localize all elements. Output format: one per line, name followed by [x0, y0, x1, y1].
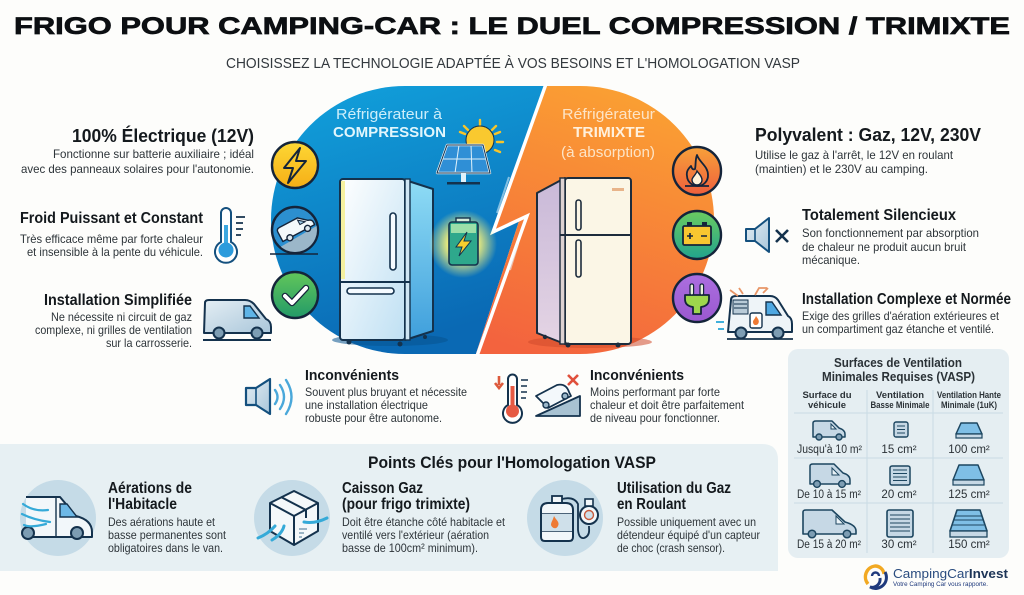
icon: check circle [272, 272, 318, 318]
block: caisson gaz [342, 480, 506, 555]
block: froid puissant: et insensible à la pente du véhicule. [27, 245, 203, 259]
block: installation complexe [802, 291, 1011, 336]
row: de 10 à 15 m² [797, 464, 990, 501]
table title: Minimales Requises (VASP) [822, 369, 975, 384]
panel: ventilation table [788, 349, 1009, 558]
block: totalement silencieux [802, 207, 979, 267]
heading: compression: COMPRESSION [333, 124, 446, 141]
block: 100% électrique: avec des panneaux solaires pour l'autonomie. [21, 162, 254, 176]
panel: points clés homologation [0, 444, 778, 571]
logo: CampingCarInvest [865, 566, 1009, 588]
block: aérations: Aérations de [108, 480, 192, 497]
block: inconvénients compression: Inconvénients [305, 367, 399, 384]
row: de 10 à 15 m²: De 10 à 15 m² [797, 489, 861, 501]
block: polyvalent: Polyvalent : Gaz, 12V, 230V [755, 125, 981, 145]
block: polyvalent: (maintien) et le 230V au camping. [755, 162, 928, 176]
block: totalement silencieux: mécanique. [802, 253, 860, 267]
heading: trimixte: TRIMIXTE [573, 124, 645, 141]
block: caisson gaz: basse de 100cm² minimum). [342, 541, 478, 555]
heading: compression: Réfrigérateur à [336, 106, 443, 123]
column headers: Minimale (1uK) [941, 400, 997, 411]
block: inconvénients trimixte: Moins performant par forte [590, 385, 720, 399]
block: installation simplifiée: Ne nécessite ni circuit de gaz [51, 310, 192, 324]
block: installation complexe: un compartiment gaz étanche et ventilé. [802, 322, 994, 336]
block: utilisation du gaz: Possible uniquement avec un [617, 515, 756, 529]
row: jusqu'à 10 m²: 100 cm² [948, 444, 990, 456]
icon: gas cylinder [527, 480, 603, 556]
block: caisson gaz: Caisson Gaz [342, 480, 423, 497]
block: aérations [108, 480, 227, 555]
icon: loud speaker [246, 379, 292, 414]
table title [822, 355, 975, 384]
block: inconvénients compression: robuste pour être autonome. [305, 411, 442, 425]
block: polyvalent: Utilise le gaz à l'arrêt, le 12V en roulant [755, 148, 954, 162]
column headers: Surface du [802, 390, 852, 401]
block: installation simplifiée: sur la carrosserie. [106, 336, 192, 350]
icon: gas box [254, 480, 330, 556]
block: totalement silencieux: de chaleur ne produit aucun bruit [802, 240, 967, 254]
block: inconvénients trimixte: de niveau pour fonctionner. [590, 411, 720, 425]
block: inconvénients compression [305, 367, 467, 425]
logo: CampingCarInvest: CampingCar Invest [893, 567, 1009, 581]
block: installation simplifiée: Installation Simplifiée [44, 292, 192, 309]
block: utilisation du gaz [617, 480, 760, 555]
blue half [260, 80, 547, 360]
block: utilisation du gaz: de choc (crash sensor). [617, 541, 725, 555]
block: froid puissant [20, 210, 203, 259]
icon: thermometer cold [215, 208, 245, 263]
logo: CampingCarInvest: Votre Camping Car vous rapporte. [893, 581, 988, 588]
block: aérations: Des aérations haute et [108, 515, 216, 529]
icon: sun and solar panel [437, 120, 503, 184]
block: polyvalent [755, 125, 981, 176]
block: inconvénients trimixte: chaleur et doit être parfaitement [590, 398, 745, 412]
block: caisson gaz: ventilé vers l'extérieur (aération [342, 528, 489, 542]
block: aérations: basse permanentes sont [108, 528, 227, 542]
heading: compression [333, 106, 446, 141]
orange half [476, 86, 714, 354]
block: 100% électrique: 100% Électrique (12V) [72, 125, 254, 146]
icon: battery [429, 210, 497, 278]
block: inconvénients compression: Souvent plus bruyant et nécessite [305, 385, 467, 399]
block: froid puissant: Froid Puissant et Constant [20, 210, 203, 227]
icon: white van [203, 300, 271, 340]
block: totalement silencieux: Son fonctionnement par absorption [802, 226, 979, 240]
icon: plug circle [673, 274, 721, 322]
heading: trimixte: (à absorption) [561, 144, 655, 161]
panel: central comparison [260, 80, 730, 360]
icon: lightning circle [272, 142, 318, 188]
block: inconvénients trimixte [590, 367, 745, 425]
column headers: Ventilation [876, 390, 924, 401]
row: jusqu'à 10 m²: Jusqu'à 10 m² [797, 444, 862, 456]
block: 100% électrique [21, 125, 254, 176]
row: jusqu'à 10 m² [797, 421, 990, 456]
icon: flame circle [673, 147, 721, 195]
block: 100% électrique: Fonctionne sur batterie auxiliaire ; idéal [53, 147, 254, 161]
block: inconvénients trimixte: Inconvénients [590, 367, 684, 384]
column headers [802, 390, 1001, 411]
column headers: Ventilation Hante [937, 390, 1001, 401]
block: installation complexe: Exige des grilles d'aération extérieures et [802, 309, 1000, 323]
table title: Surfaces de Ventilation [834, 355, 962, 370]
block: aérations: obligatoires dans le van. [108, 541, 223, 555]
row: de 15 à 20 m²: 150 cm² [948, 539, 990, 551]
row: de 15 à 20 m²: De 15 à 20 m² [797, 539, 861, 551]
block: froid puissant: Très efficace même par forte chaleur [20, 232, 203, 246]
lightning highlights [497, 177, 518, 270]
heading: trimixte [561, 106, 655, 161]
row: de 10 à 15 m²: 20 cm² [881, 489, 917, 501]
block: installation simplifiée: complexe, ni grilles de ventilation [35, 323, 192, 337]
block: utilisation du gaz: Utilisation du Gaz [617, 480, 731, 497]
icon: ventilated van with gas [716, 288, 793, 339]
row: de 15 à 20 m² [797, 510, 990, 551]
subtitle: CHOISISSEZ LA TECHNOLOGIE ADAPTÉE À VOS BESOINS ET L'HOMOLOGATION VASP [226, 55, 800, 72]
title: FRIGO POUR CAMPING-CAR : LE DUEL COMPRESSION / TRIMIXTE [14, 13, 1010, 40]
column headers: véhicule [808, 400, 846, 411]
block: utilisation du gaz: en Roulant [617, 496, 687, 513]
row: de 10 à 15 m²: 125 cm² [948, 489, 990, 501]
row: jusqu'à 10 m²: 15 cm² [881, 444, 917, 456]
icon: ventilated van [20, 480, 96, 556]
trimixte fridge [528, 178, 652, 348]
block: utilisation du gaz: détendeur équipé d'un capteur [617, 528, 760, 542]
icon: car battery circle [673, 211, 721, 259]
icon: van on slope circle [270, 207, 320, 254]
block: installation simplifiée [35, 292, 192, 350]
icon: silent speaker [746, 218, 788, 252]
row: de 15 à 20 m²: 30 cm² [881, 539, 917, 551]
block: caisson gaz: (pour frigo trimixte) [342, 496, 470, 513]
column headers: Basse Minimale [870, 400, 930, 411]
panel heading: Points Clés pour l'Homologation VASP [368, 454, 656, 472]
block: aérations: l'Habitacle [108, 496, 177, 513]
lightning divider [477, 84, 546, 356]
block: inconvénients compression: une installation électrique [305, 398, 428, 412]
heading: trimixte: Réfrigérateur [562, 106, 655, 123]
block: totalement silencieux: Totalement Silencieux [802, 207, 956, 224]
block: caisson gaz: Doit être étanche côté habitacle et [342, 515, 506, 529]
compression fridge [332, 179, 448, 346]
icon: hot thermometer and slope [495, 374, 580, 423]
